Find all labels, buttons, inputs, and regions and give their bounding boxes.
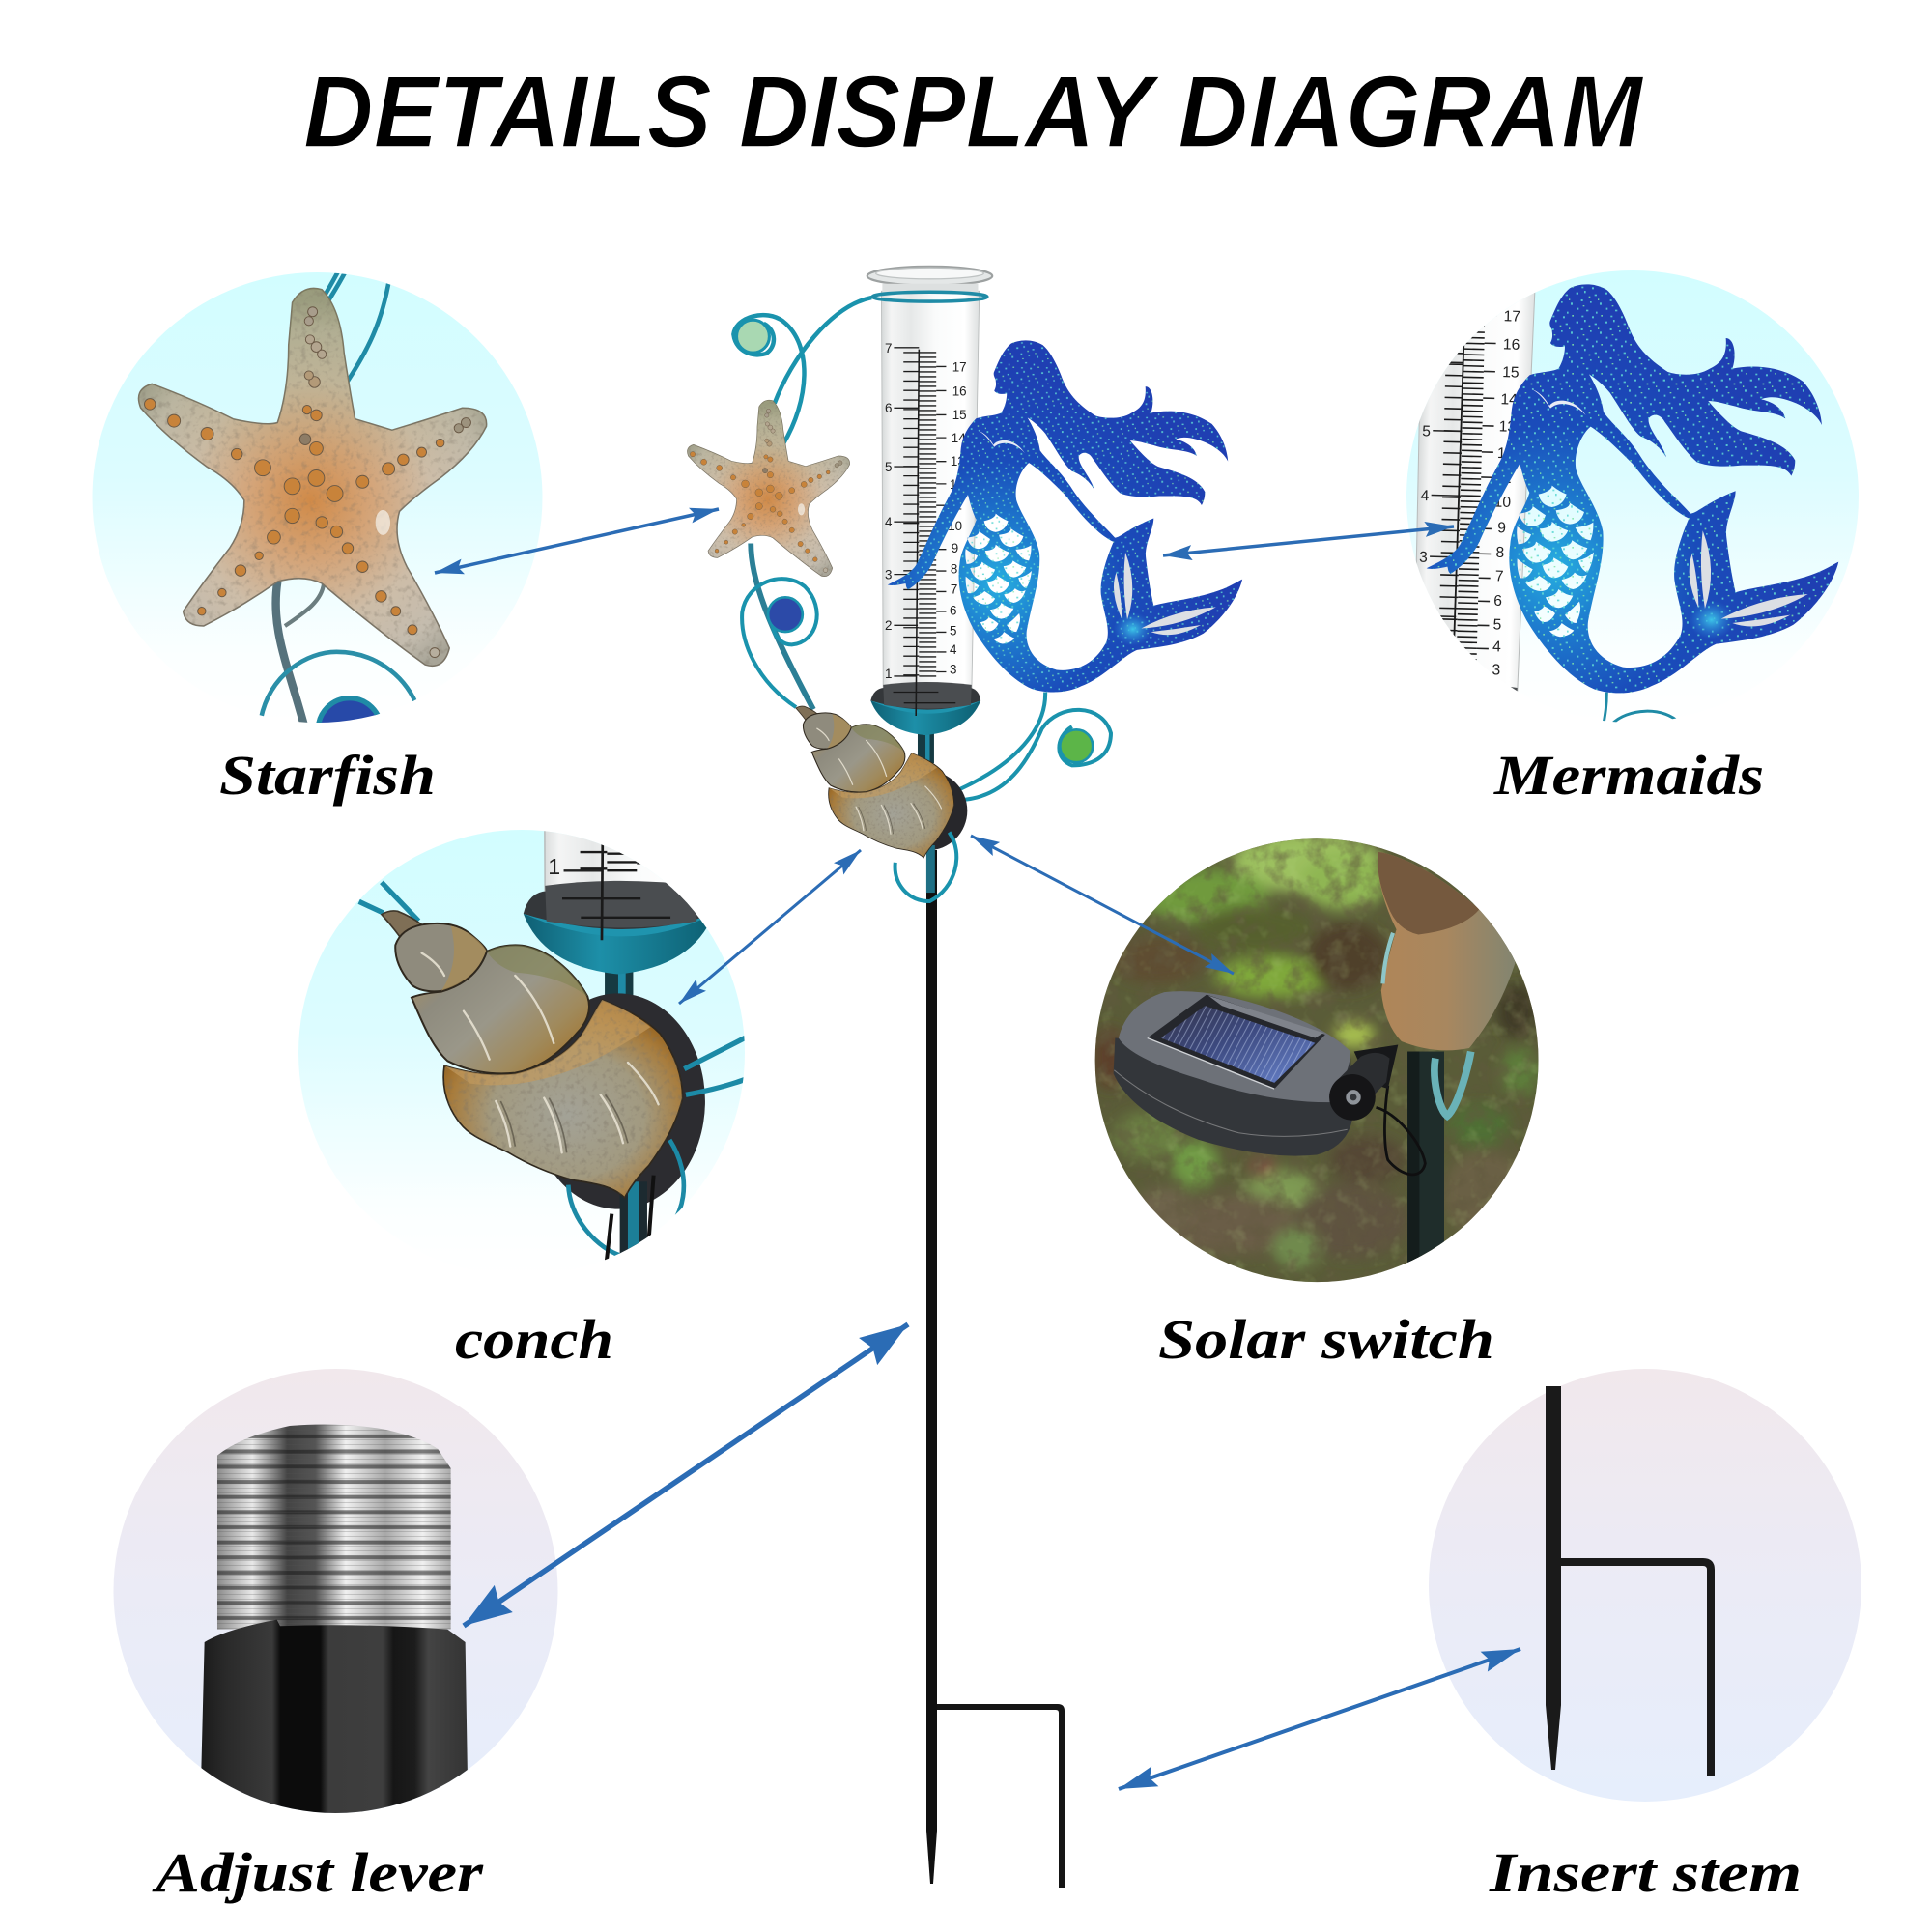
icon: starfish close-up xyxy=(138,264,487,761)
label: conch: conch xyxy=(455,1308,613,1371)
mermaid silhouette xyxy=(888,340,1242,693)
panel: solar switch detail xyxy=(1094,832,1544,1371)
black stake xyxy=(926,850,1065,1888)
solar body xyxy=(1114,1038,1352,1156)
conch shell xyxy=(796,706,954,858)
label: Adjust lever: Adjust lever xyxy=(152,1841,483,1904)
icon: mermaid close-up xyxy=(1393,196,1838,780)
panel: mermaid detail xyxy=(1406,270,1859,794)
decorative wires and marbles xyxy=(733,298,1111,800)
arrow: adjust lever xyxy=(464,1324,908,1626)
arrow: mermaid xyxy=(1163,526,1454,555)
pivot and bracket xyxy=(1354,1045,1398,1089)
label: Mermaids: Mermaids xyxy=(1493,744,1764,807)
panel: adjust lever detail xyxy=(114,1369,558,1904)
label: Insert stem: Insert stem xyxy=(1489,1841,1802,1904)
stake xyxy=(1407,1052,1444,1268)
arrow: starfish xyxy=(435,509,719,573)
central product: mermaid rain gauge stake xyxy=(688,267,1242,1888)
arrow: conch xyxy=(679,850,861,1004)
icon: threaded rod joint xyxy=(200,1425,469,1835)
title: DETAILS DISPLAY DIAGRAM xyxy=(303,55,1645,169)
icon: conch close-up xyxy=(357,831,745,1260)
label: Solar switch: Solar switch xyxy=(1158,1308,1494,1371)
arrow: insert stem xyxy=(1119,1649,1520,1789)
rain gauge tube xyxy=(867,267,992,763)
shell above xyxy=(1378,852,1515,1050)
photo: solar panel on stake in garden xyxy=(1094,832,1544,1289)
panel: insert stem detail xyxy=(1429,1369,1861,1904)
starfish xyxy=(688,400,850,577)
panel: starfish detail xyxy=(93,264,543,807)
mounting disc and lower loops xyxy=(888,771,967,901)
icon: forked stake close-up xyxy=(1546,1386,1715,1776)
arrow: solar switch xyxy=(971,836,1234,974)
panel: conch detail xyxy=(298,830,745,1358)
label: Starfish: Starfish xyxy=(219,744,436,807)
